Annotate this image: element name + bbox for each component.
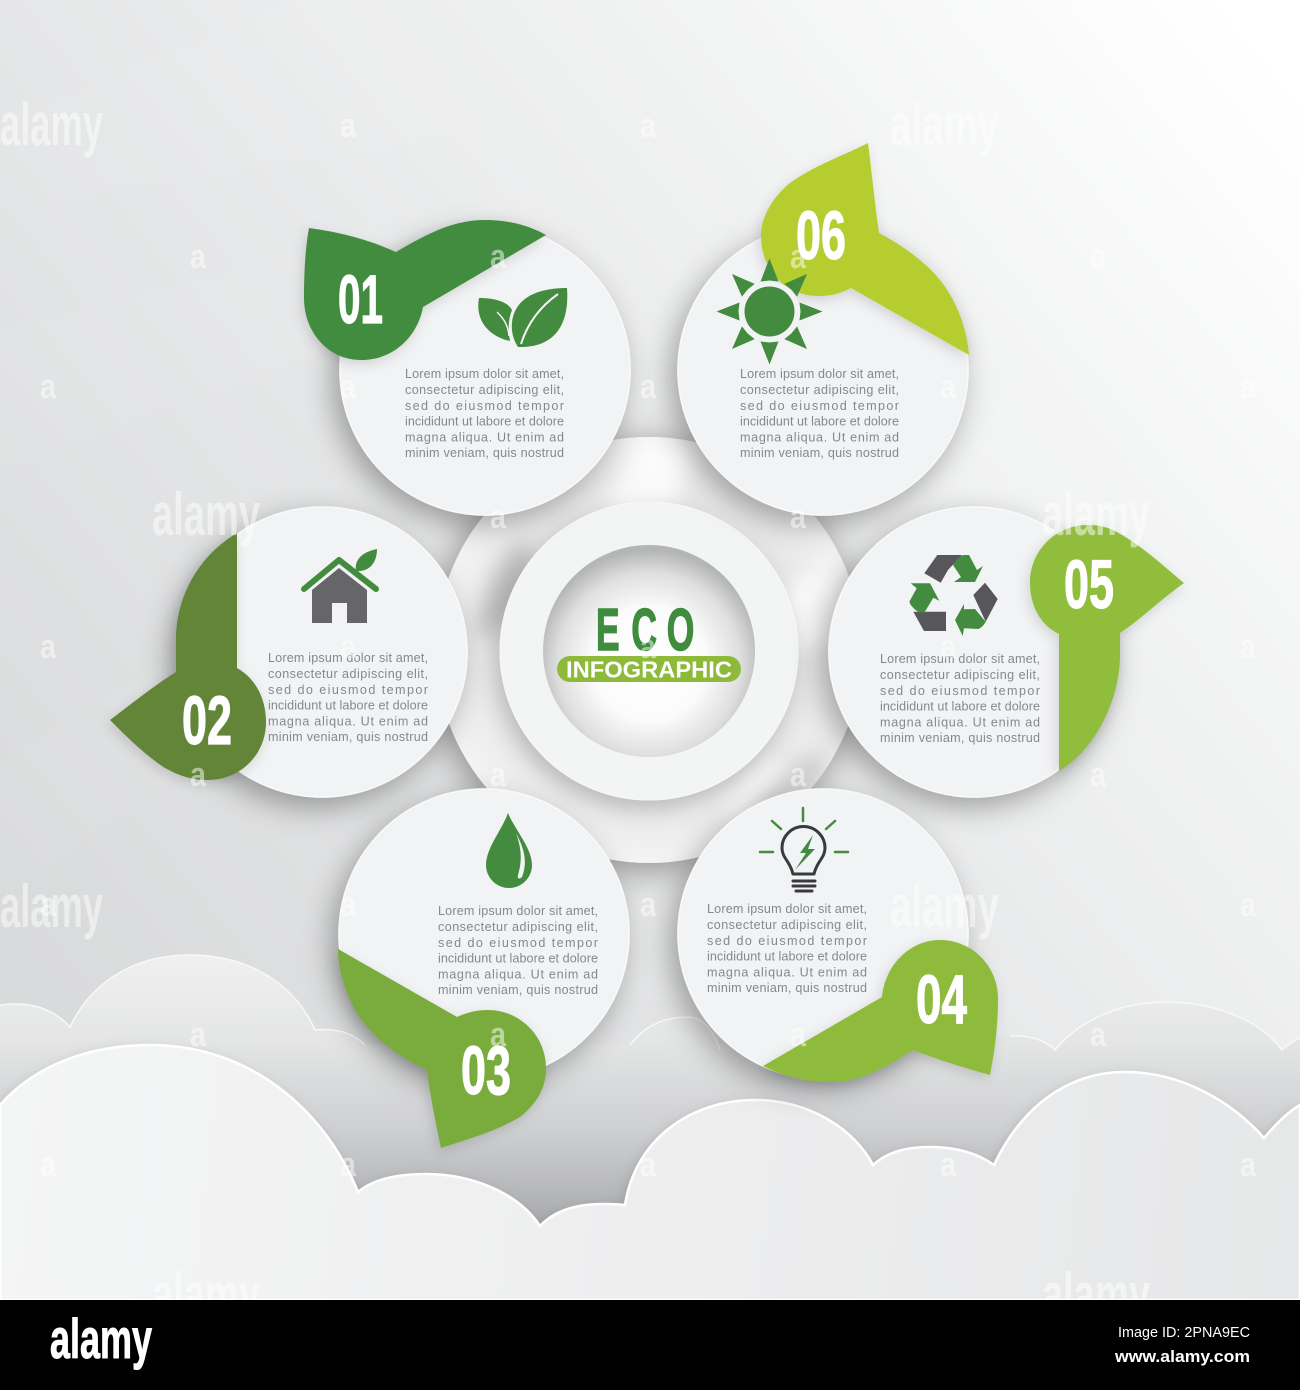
number 04: 04: [916, 961, 967, 1038]
text block 06: [740, 367, 899, 460]
watermarks: a: [940, 368, 957, 406]
watermarks: a: [40, 368, 57, 406]
text block 06: sed do eiusmod tempor: [740, 399, 899, 413]
panel: step 02: [110, 507, 467, 797]
text block 06: minim veniam, quis nostrud: [740, 446, 899, 460]
watermarks: a: [790, 238, 807, 276]
watermarks: a: [1240, 368, 1257, 406]
text block 05: magna aliqua. Ut enim ad: [880, 716, 1040, 730]
text block 06: incididunt ut labore et dolore: [740, 414, 899, 428]
back cloud layer: [0, 955, 1300, 1300]
watermarks: a: [640, 1146, 657, 1184]
watermarks: a: [490, 498, 507, 536]
icon: leaves: [478, 288, 567, 347]
panel: step 04: [678, 789, 998, 1082]
watermarks: a: [940, 1146, 957, 1184]
text block 05: sed do eiusmod tempor: [880, 684, 1040, 698]
number 06: 06: [796, 197, 846, 274]
number 01: 01: [338, 261, 383, 338]
watermarks: a: [490, 1016, 507, 1054]
watermarks: a: [790, 498, 807, 536]
watermarks: a: [340, 1146, 357, 1184]
watermarks: alamy: [0, 873, 103, 940]
text block 01: consectetur adipiscing elit,: [405, 383, 564, 397]
text block 05: consectetur adipiscing elit,: [880, 668, 1040, 682]
text block 05: Lorem ipsum dolor sit amet,: [880, 652, 1040, 666]
text block 05: minim veniam, quis nostrud: [880, 731, 1040, 745]
text block 03: consectetur adipiscing elit,: [438, 920, 598, 934]
text block 04: consectetur adipiscing elit,: [707, 918, 867, 932]
watermarks: a: [340, 628, 357, 666]
text block 03: incididunt ut labore et dolore: [438, 952, 598, 966]
text block 02: minim veniam, quis nostrud: [268, 730, 428, 744]
text block 02: magna aliqua. Ut enim ad: [268, 714, 428, 728]
watermarks: a: [340, 886, 357, 924]
icon: recycle: [909, 555, 998, 636]
text block 03: sed do eiusmod tempor: [438, 936, 598, 950]
number 03: 03: [461, 1032, 511, 1109]
icon: sun: [716, 258, 822, 364]
watermarks: a: [1090, 238, 1107, 276]
watermarks: alamy: [1042, 481, 1150, 548]
watermarks: a: [340, 368, 357, 406]
title pill: infographic: INFOGRAPHIC: [566, 656, 732, 682]
text block 04: minim veniam, quis nostrud: [707, 981, 867, 995]
ribbon 01: [304, 220, 546, 360]
watermarks: alamy: [152, 481, 260, 548]
watermarks: a: [40, 886, 57, 924]
text block 04: incididunt ut labore et dolore: [707, 950, 867, 964]
number 05: 05: [1064, 546, 1114, 623]
watermarks: alamy: [890, 873, 999, 940]
text block 06: magna aliqua. Ut enim ad: [740, 430, 899, 444]
watermarks: alamy: [1042, 1261, 1150, 1328]
watermarks: a: [640, 368, 657, 406]
watermarks: a: [190, 756, 207, 794]
footer logo: alamy: [50, 1307, 152, 1370]
number 02: 02: [182, 682, 232, 759]
watermarks: a: [940, 628, 957, 666]
ribbon 05: [1030, 525, 1184, 771]
text block 02: consectetur adipiscing elit,: [268, 667, 428, 681]
text block 03: Lorem ipsum dolor sit amet,: [438, 904, 598, 918]
panel: step 05: [829, 507, 1184, 797]
text block 03: magna aliqua. Ut enim ad: [438, 968, 598, 982]
footer bar: [0, 1300, 1300, 1390]
watermarks: a: [1240, 886, 1257, 924]
icon: light bulb: [760, 808, 848, 891]
watermarks: alamy: [0, 91, 103, 158]
text block 06: consectetur adipiscing elit,: [740, 383, 899, 397]
text block 02: [268, 651, 428, 744]
text block 05: incididunt ut labore et dolore: [880, 700, 1040, 714]
title: eco: ECO: [596, 598, 694, 663]
text block 06: Lorem ipsum dolor sit amet,: [740, 367, 899, 381]
watermarks: a: [190, 1016, 207, 1054]
ribbon 02: [110, 533, 266, 780]
watermarks: a: [640, 107, 657, 145]
watermarks: a: [640, 886, 657, 924]
watermarks: a: [490, 756, 507, 794]
center disc: [543, 545, 755, 757]
watermarks: a: [1090, 756, 1107, 794]
watermarks: a: [1240, 1146, 1257, 1184]
text block 01: [405, 367, 564, 460]
text block 04: sed do eiusmod tempor: [707, 934, 867, 948]
center ring: [500, 502, 798, 800]
text block 01: magna aliqua. Ut enim ad: [405, 430, 564, 444]
watermarks: a: [1240, 628, 1257, 666]
watermarks: a: [790, 756, 807, 794]
text block 04: [707, 902, 867, 995]
icon: water drop: [486, 813, 532, 888]
watermarks: a: [40, 628, 57, 666]
text block 02: Lorem ipsum dolor sit amet,: [268, 651, 428, 665]
footer url: www.alamy.com: [1114, 1347, 1250, 1366]
watermarks: alamy: [152, 1261, 260, 1328]
text block 01: minim veniam, quis nostrud: [405, 446, 564, 460]
text block 03: [438, 904, 598, 997]
panel: step 01: [304, 220, 630, 515]
text block 03: minim veniam, quis nostrud: [438, 983, 598, 997]
watermarks: a: [640, 628, 657, 666]
text block 04: magna aliqua. Ut enim ad: [707, 966, 867, 980]
text block 01: sed do eiusmod tempor: [405, 399, 564, 413]
front cloud layer: [0, 1045, 1300, 1300]
panel: step 06: [678, 143, 969, 515]
text block 01: Lorem ipsum dolor sit amet,: [405, 367, 564, 381]
watermarks: a: [790, 1016, 807, 1054]
text block 02: sed do eiusmod tempor: [268, 683, 428, 697]
ribbon 04: [763, 940, 998, 1082]
watermarks: a: [40, 1146, 57, 1184]
text block 02: incididunt ut labore et dolore: [268, 698, 428, 712]
watermarks: alamy: [890, 91, 999, 158]
watermarks: a: [1090, 1016, 1107, 1054]
text block 04: Lorem ipsum dolor sit amet,: [707, 902, 867, 916]
ribbon 03: [338, 949, 546, 1148]
text block 05: [880, 652, 1040, 745]
footer image id: Image ID: 2PNA9EC: [1118, 1324, 1250, 1341]
icon: house with leaf: [304, 549, 377, 623]
watermarks: a: [340, 107, 357, 145]
central flower backing: [436, 437, 862, 863]
watermarks: a: [490, 238, 507, 276]
watermarks: a: [190, 238, 207, 276]
text block 01: incididunt ut labore et dolore: [405, 414, 564, 428]
ribbon 06: [761, 143, 969, 355]
panel: step 03: [338, 789, 629, 1148]
